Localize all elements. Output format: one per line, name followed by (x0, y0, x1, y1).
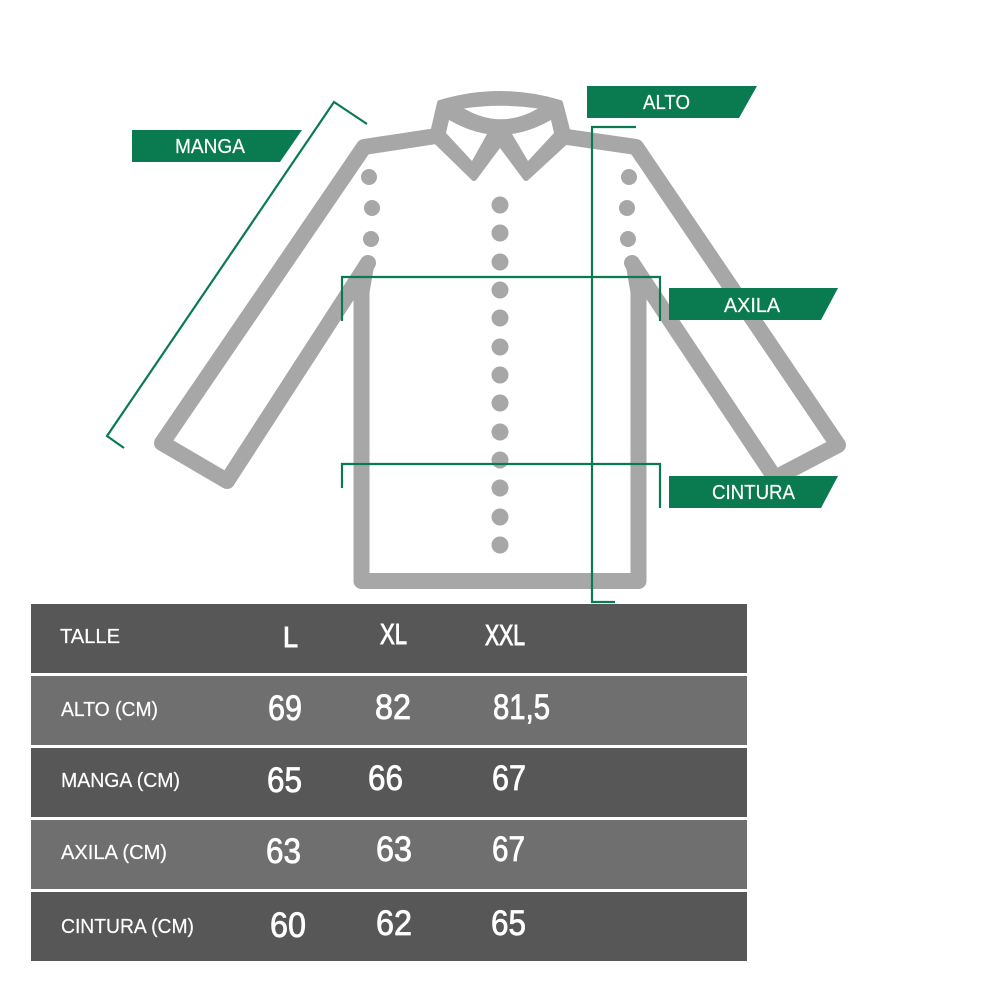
row: cintura (31, 892, 747, 961)
row: alto: 69 (268, 689, 302, 728)
row: axila: AXILA (CM) (61, 841, 167, 864)
row: axila: 67 (492, 830, 525, 869)
row: manga: MANGA (CM) (61, 769, 180, 792)
label: alto: ALTO (643, 91, 690, 114)
row: alto: ALTO (CM) (61, 698, 158, 721)
row: manga: 65 (267, 761, 302, 800)
row: cintura: 62 (376, 904, 412, 943)
icon: shirt buttons (361, 169, 637, 554)
size table (31, 604, 747, 961)
row: talle: XL (380, 619, 407, 651)
label: axila (669, 288, 838, 320)
row: cintura: CINTURA (CM) (61, 915, 194, 938)
row: cintura: 60 (270, 906, 306, 945)
label: cintura: CINTURA (712, 481, 795, 504)
row: talle: L (283, 622, 298, 654)
row: talle: XXL (485, 620, 525, 652)
label: axila: AXILA (724, 294, 780, 317)
label: manga (132, 130, 302, 162)
row: talle (31, 604, 747, 673)
row: axila: 63 (376, 830, 412, 869)
icon: shirt outline (162, 94, 838, 581)
row: alto: 82 (375, 688, 411, 727)
row: manga (31, 748, 747, 817)
row: alto (31, 676, 747, 745)
label: alto (587, 86, 757, 118)
row: talle: TALLE (60, 625, 120, 648)
label: cintura (669, 476, 838, 508)
row: axila: 63 (266, 832, 301, 871)
row: axila (31, 820, 747, 889)
row: alto: 81,5 (493, 688, 550, 727)
row: cintura: 65 (491, 904, 526, 943)
label: manga: MANGA (175, 135, 245, 158)
measurement lines (107, 102, 660, 602)
row: manga: 67 (492, 759, 526, 798)
row: manga: 66 (368, 759, 403, 798)
